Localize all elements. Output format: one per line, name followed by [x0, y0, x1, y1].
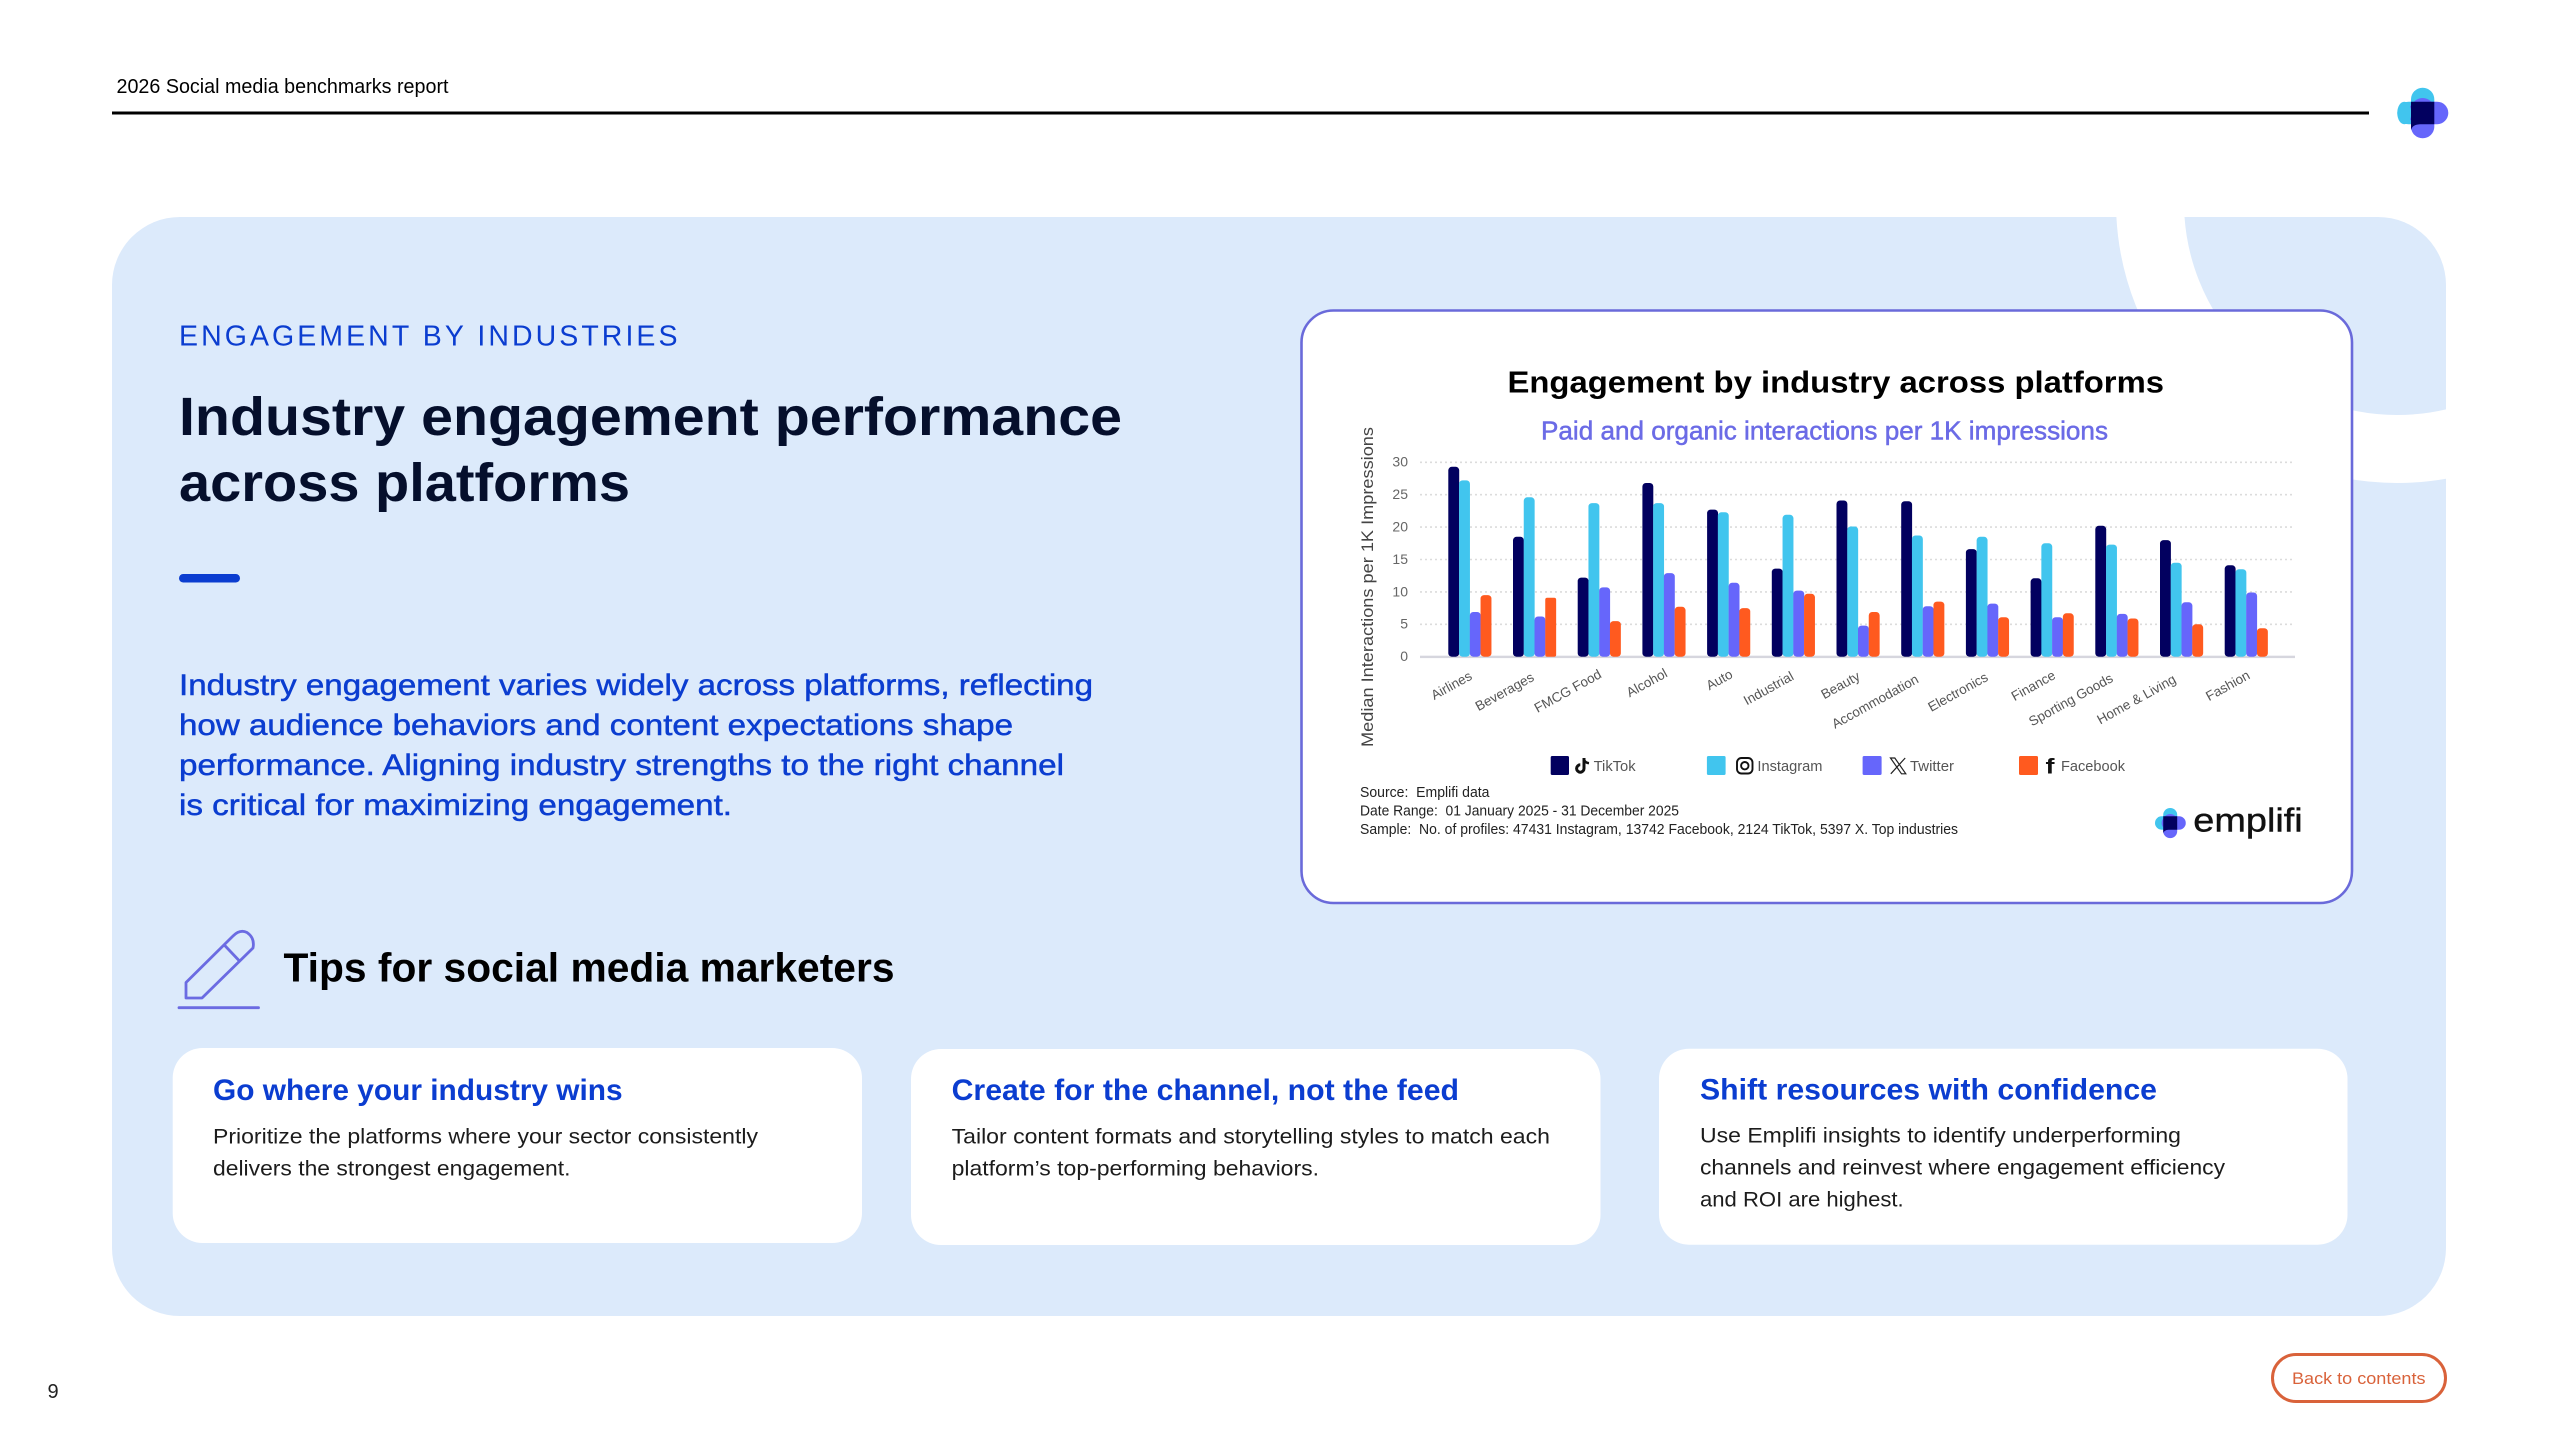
legend: TikTok: TikTok — [1594, 758, 1636, 775]
button: back to contents — [2272, 1354, 2446, 1402]
chart source notes: Date Range: 01 January 2025 - 31 December 2025 — [1360, 804, 1679, 820]
main title — [179, 387, 1122, 513]
button: back to contents: Back to contents — [2292, 1369, 2426, 1388]
x-axis industry labels: Home & Living — [2094, 672, 2178, 727]
card body: Use Emplifi insights to identify underperforming — [1700, 1124, 2181, 1148]
eyebrow heading: ENGAGEMENT BY INDUSTRIES — [179, 320, 678, 352]
page number: 9 — [48, 1381, 59, 1403]
header: report title: 2026 Social media benchmarks report — [116, 76, 449, 98]
legend: Facebook — [2019, 756, 2125, 778]
y-axis tick labels: 20 — [1392, 518, 1408, 534]
legend — [1551, 756, 2125, 778]
x-axis industry labels: Accommodation — [1829, 672, 1921, 732]
legend: TikTok — [1551, 756, 1636, 775]
x-axis industry labels: Finance — [2009, 668, 2058, 704]
legend: Facebook: f — [2046, 756, 2056, 778]
x-axis industry labels: Beauty — [1818, 668, 1863, 702]
card heading: Create for the channel, not the feed — [952, 1074, 1459, 1107]
card body — [213, 1124, 758, 1180]
y-axis tick labels: 25 — [1392, 486, 1408, 502]
card heading: Shift resources with confidence — [1700, 1073, 2157, 1106]
chart title: Engagement by industry across platforms — [1508, 365, 2164, 400]
chart source notes: Source: Emplifi data — [1360, 785, 1490, 801]
accent dash — [179, 574, 240, 582]
panel: main background — [112, 217, 2446, 1316]
intro paragraph: Industry engagement varies widely across platforms, reflecting — [179, 669, 1093, 702]
legend: Twitter: Twitter — [1910, 758, 1954, 775]
y-axis tick labels: 15 — [1392, 551, 1408, 567]
card body: platform’s top-performing behaviors. — [952, 1156, 1319, 1180]
x-axis industry labels: Alcohol — [1624, 666, 1670, 700]
y-axis tick labels: 0 — [1400, 648, 1408, 664]
card heading: Go where your industry wins — [213, 1074, 623, 1107]
legend: Instagram: Instagram — [1757, 758, 1822, 775]
icon: Emplifi logo mark, header — [2397, 88, 2448, 138]
header rule — [112, 112, 2369, 114]
legend: Instagram — [1707, 756, 1822, 775]
card: create for the channel — [911, 1049, 1600, 1245]
chart source notes: Sample: No. of profiles: 47431 Instagram, 13742 Facebook, 2124 TikTok, 5397 X. Top industries — [1360, 822, 1958, 838]
main title: across platforms — [179, 453, 630, 513]
x-axis industry labels: Electronics — [1925, 669, 1991, 715]
card: go where your industry wins — [173, 1048, 862, 1243]
panel: chart card — [1302, 310, 2352, 903]
x-axis industry labels: Airlines — [1428, 668, 1475, 703]
legend: Facebook: Facebook — [2061, 758, 2125, 775]
y-axis tick labels — [1392, 454, 1408, 664]
card body: delivers the strongest engagement. — [213, 1156, 570, 1180]
x-axis industry labels: Industrial — [1741, 669, 1796, 708]
card body — [1700, 1124, 2225, 1212]
chart subtitle: Paid and organic interactions per 1K impressions — [1541, 415, 2108, 445]
intro paragraph: performance. Aligning industry strengths to the right channel — [179, 749, 1064, 782]
card: shift resources — [1659, 1049, 2348, 1245]
intro paragraph — [179, 669, 1093, 822]
card body: Tailor content formats and storytelling styles to match each — [952, 1124, 1550, 1148]
icon: pencil — [179, 931, 258, 1008]
x-axis industry labels: Beverages — [1473, 669, 1537, 714]
card body: channels and reinvest where engagement efficiency — [1700, 1156, 2225, 1180]
card body: and ROI are highest. — [1700, 1188, 1904, 1212]
x-axis industry labels: Auto — [1704, 667, 1735, 693]
y-axis title: Median Interactions per 1K Impressions — [1358, 427, 1377, 747]
y-axis tick labels: 5 — [1400, 616, 1408, 632]
main title: Industry engagement performance — [179, 387, 1122, 447]
y-axis tick labels: 10 — [1392, 583, 1408, 599]
card body — [952, 1124, 1550, 1180]
legend: Twitter — [1863, 756, 1954, 775]
chart source notes — [1360, 785, 1958, 838]
x-axis industry labels: Sporting Goods — [2026, 670, 2116, 729]
intro paragraph: how audience behaviors and content expectations shape — [179, 709, 1013, 742]
intro paragraph: is critical for maximizing engagement. — [179, 789, 732, 822]
bar chart — [1448, 467, 2268, 657]
x-axis industry labels: FMCG Food — [1532, 667, 1604, 716]
card body: Prioritize the platforms where your sector consistently — [213, 1124, 758, 1148]
x-axis industry labels — [1428, 666, 2252, 732]
Emplifi logo, chart — [2155, 802, 2303, 839]
Emplifi logo, chart: emplifi — [2193, 802, 2303, 839]
y-axis tick labels: 30 — [1392, 454, 1408, 470]
section heading: tips: Tips for social media marketers — [284, 945, 894, 991]
x-axis industry labels: Fashion — [2203, 668, 2252, 704]
